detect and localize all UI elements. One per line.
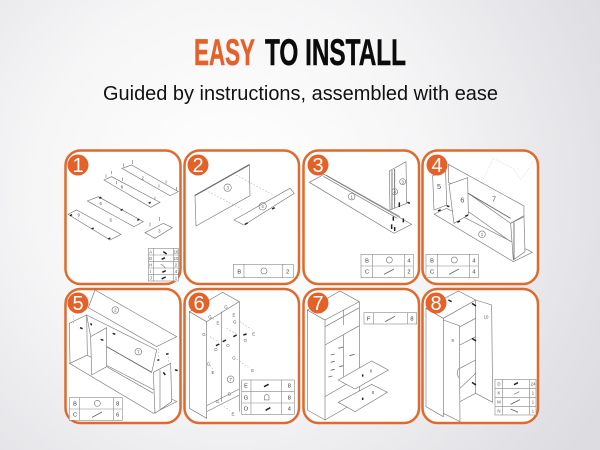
step 5 line drawing: C (73, 413, 77, 419)
step 6 line drawing: G (208, 314, 212, 319)
step 2 line drawing: 3 (226, 185, 229, 190)
step 7 line drawing: 8 (372, 390, 375, 395)
step 6 line drawing: 8 (288, 395, 291, 401)
step 6 line drawing: G (224, 304, 228, 309)
step 6 line drawing: O (244, 407, 249, 413)
step 6 badge: 6 (193, 293, 205, 315)
step 2 line drawing: 4 (261, 204, 264, 209)
step 6 line drawing: G (228, 392, 232, 397)
step 1 line drawing: 2 (175, 262, 178, 267)
step 4 line drawing: 7 (492, 195, 496, 204)
step 3 line drawing: 4 (407, 258, 411, 264)
step 5 line drawing: B (73, 401, 77, 407)
step 1 line drawing: 2 (141, 176, 144, 181)
step 6 line drawing (189, 292, 294, 418)
step 6 line drawing: 8 (288, 384, 291, 390)
step 3 badge: 3 (312, 155, 324, 177)
step 6 line drawing: G (207, 361, 211, 366)
step 4 line drawing (426, 158, 533, 278)
panel: step 3 (304, 150, 419, 284)
step 8 line drawing: 1 (532, 408, 535, 413)
step 8 line drawing: 24 (531, 381, 536, 386)
step 7 line drawing: 8 (410, 316, 414, 322)
step 4 line drawing: 1 (481, 232, 484, 237)
title: EASY (194, 32, 255, 73)
step 6 line drawing: E (244, 384, 248, 390)
step 6 line drawing: G (233, 320, 237, 325)
step 2 line drawing (195, 164, 294, 278)
panel: step 1 (66, 150, 180, 284)
title: TO INSTALL (265, 32, 406, 73)
step 6 line drawing: E (251, 368, 254, 373)
step 6 line drawing: E (212, 370, 215, 375)
step 6 line drawing: 4 (288, 407, 291, 413)
step 8 line drawing: M (497, 399, 501, 404)
step 7 line drawing: 8 (370, 369, 373, 374)
step 1 line drawing: 10 (174, 256, 179, 261)
step 1 line drawing: 9 (77, 212, 80, 217)
step 7 badge: 7 (312, 293, 324, 315)
step 6 line drawing: G (244, 395, 248, 401)
step 6 line drawing: G (216, 399, 220, 404)
step 4 line drawing: 6 (460, 196, 464, 205)
step 4 line drawing: 4 (472, 270, 476, 276)
step 6 line drawing: E (217, 320, 220, 325)
step 4 line drawing: 4 (472, 258, 476, 264)
step 5 line drawing: 7 (137, 349, 140, 354)
step 1 line drawing: I (150, 269, 151, 274)
step 8 line drawing: 10 (484, 315, 489, 320)
step 1 line drawing: 4 (175, 269, 178, 274)
step 7 line drawing: F (367, 316, 371, 322)
step 3 line drawing: 1 (350, 194, 353, 199)
step 5 badge: 5 (72, 293, 84, 315)
step 3 line drawing: C (365, 270, 369, 276)
step 8 badge: 8 (430, 293, 442, 315)
step 3 line drawing: 3 (401, 179, 404, 184)
step 8 line drawing: N (497, 408, 501, 413)
step 2 line drawing: B (237, 269, 241, 275)
step 5 line drawing: 6 (116, 413, 119, 419)
step 4 line drawing: C (430, 270, 434, 276)
step 3 line drawing (309, 162, 413, 278)
step 1 line drawing (68, 160, 179, 281)
step 1 badge: 1 (72, 155, 84, 177)
step 8 line drawing: 9 (451, 338, 454, 343)
step 1 line drawing: D (149, 256, 152, 261)
step 6 line drawing: 7 (229, 377, 232, 382)
step 5 line drawing: 8 (116, 401, 119, 407)
step 1 line drawing: 8 (121, 184, 124, 189)
step 6 line drawing: G (232, 356, 236, 361)
step 6 line drawing: E (233, 312, 236, 317)
step 5 line drawing: 2 (114, 308, 117, 313)
step 2 line drawing: 2 (286, 269, 289, 275)
step 6 line drawing: O (214, 347, 218, 352)
step 5 line drawing (69, 290, 178, 420)
step 3 line drawing: B (365, 258, 369, 264)
subtitle: Guided by instructions, assembled with ease (103, 83, 498, 105)
step 6 line drawing: O (244, 338, 248, 343)
step 8 line drawing: K (498, 390, 501, 395)
step 1 line drawing: 16 (174, 249, 179, 254)
step 1 line drawing: H (149, 262, 152, 267)
panel: step 4 (422, 150, 538, 284)
step 7 line drawing (307, 291, 417, 420)
step 1 line drawing: 1 (175, 275, 178, 280)
step 3 line drawing: 2 (407, 270, 411, 276)
step 1 line drawing: 3 (158, 228, 161, 233)
panel: step 6 (184, 289, 299, 423)
panel: step 5 (66, 289, 180, 423)
step 1 line drawing: 6 (109, 217, 112, 222)
step 4 line drawing: B (430, 258, 434, 264)
step 8 line drawing: 1 (532, 399, 535, 404)
step 1 line drawing: A (149, 249, 152, 254)
step 4 line drawing: 5 (437, 182, 441, 191)
step 6 line drawing: E (232, 411, 235, 416)
step 8 line drawing: D (497, 381, 501, 386)
title (194, 32, 406, 73)
step 6 line drawing: E (252, 331, 255, 336)
step 3 line drawing: 4 (393, 189, 396, 194)
step 8 line drawing (426, 291, 536, 422)
panel: step 7 (304, 289, 419, 423)
panel: step 8 (422, 289, 538, 423)
step 1 line drawing: 6 (99, 201, 102, 206)
step 8 line drawing: 1 (532, 390, 535, 395)
step 4 badge: 4 (431, 155, 443, 177)
step 6 line drawing: O (226, 343, 230, 348)
step 2 badge: 2 (192, 155, 204, 177)
step 1 line drawing: J (150, 275, 152, 280)
step 6 line drawing: G (202, 332, 206, 337)
panel: step 2 (184, 150, 299, 284)
